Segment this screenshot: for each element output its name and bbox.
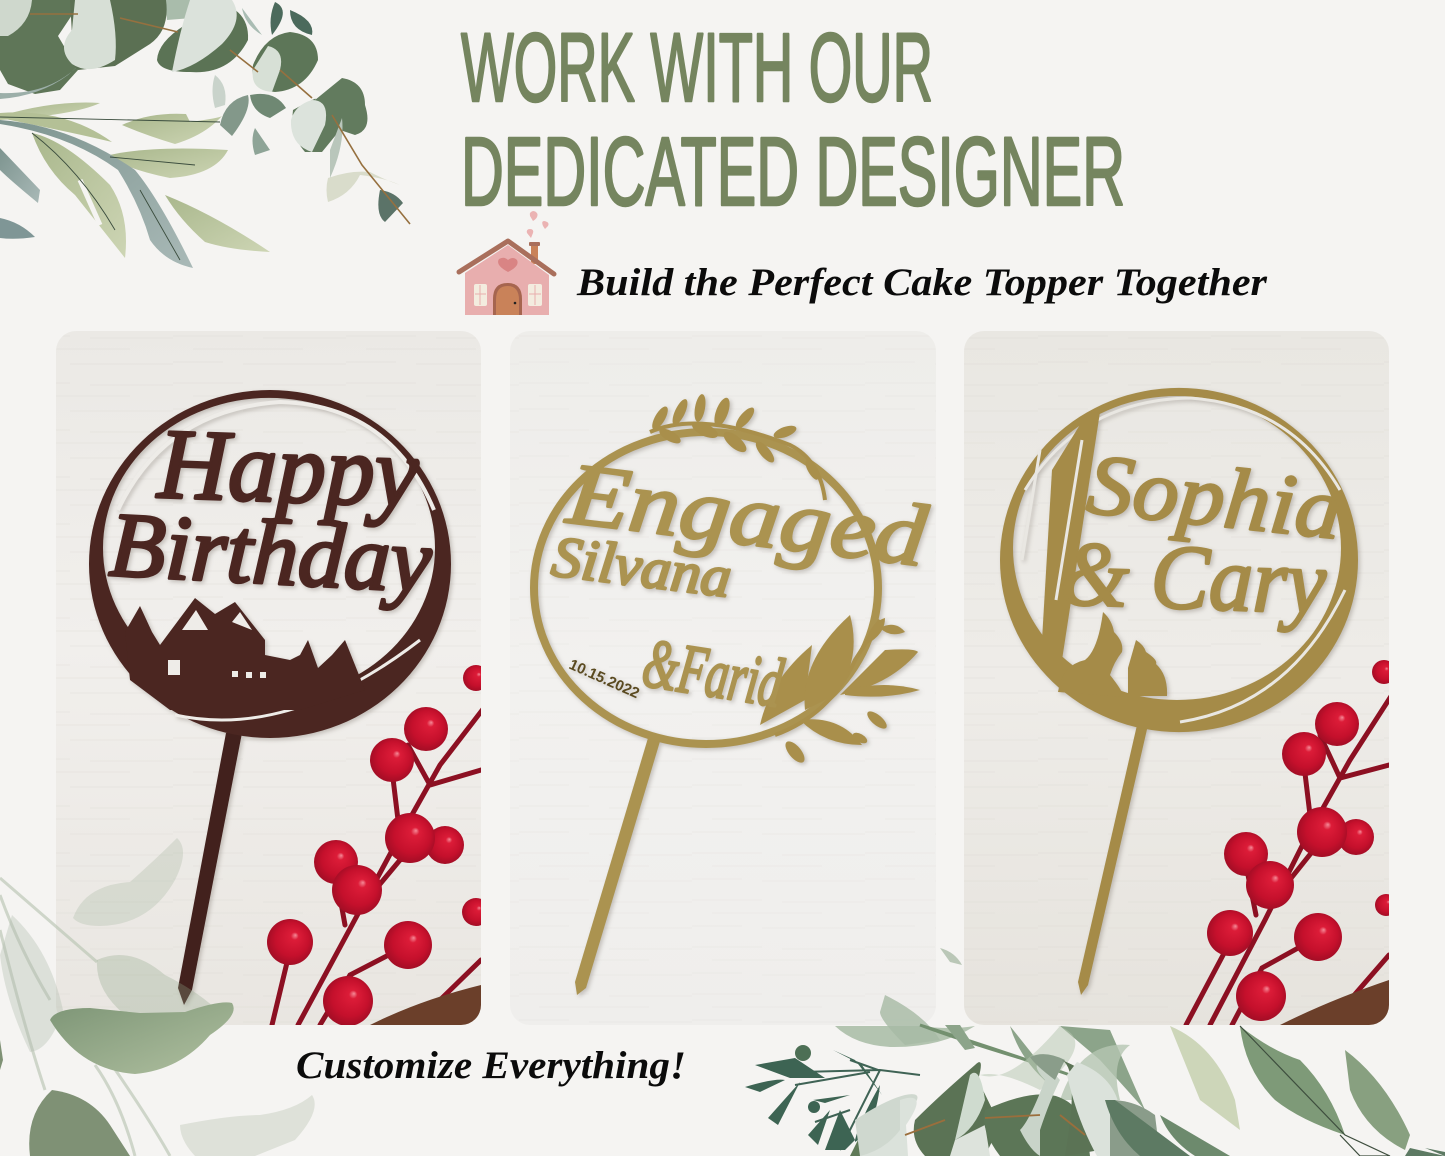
scene: cabin and pine trees [125,598,365,710]
illustration: top-left eucalyptus and olive foliage [0,0,410,268]
long green leaves [1240,1026,1345,1135]
sprig [795,1060,920,1150]
illustration: bottom-right eucalyptus foliage [745,948,1445,1156]
script text: Engaged [560,445,933,586]
topper: Happy Birthday [89,390,451,1005]
topper: Engaged wreath [534,393,933,995]
script text [1059,435,1347,633]
berries [1186,660,1397,1025]
caption: Customize Everything! [296,1044,686,1087]
berries [267,665,490,1026]
wood background [56,331,481,1025]
stems [0,878,170,1156]
birch trees [1042,412,1100,660]
subtitle: Build the Perfect Cake Topper Together [576,261,1268,304]
script text [548,445,933,723]
date: 10.15.2022 [566,656,642,702]
script text: & Cary [1059,522,1328,633]
solid leaf [50,1002,234,1074]
rabbits [1058,612,1167,697]
panel: Sophia and Cary topper photo [964,331,1397,1025]
lower leaf [29,1090,130,1156]
script text: Sophia [1083,435,1347,558]
script text [107,408,434,612]
leaf sprig top [649,393,825,500]
script text: Birthday [107,493,434,612]
edge leaf [0,1040,3,1070]
leaf wreath lower right [760,615,920,766]
icon: pink house with hearts [459,211,554,315]
wood background [964,331,1389,1025]
panel: Engaged topper photo [510,331,936,1025]
script text: Happy [154,408,421,528]
wood background [510,331,936,1025]
eucalyptus leaves [850,1139,895,1156]
script text: &Farid [637,625,788,723]
pale leaves [880,995,940,1045]
title [461,13,1125,226]
script text: Silvana [548,523,735,610]
panel: Happy Birthday topper photo [56,331,490,1026]
faded leaves [73,838,183,926]
title line 1: WORK WITH OUR [461,13,933,122]
illustration: bottom-left faded leaves [0,838,315,1156]
topper: Sophia and Cary [1000,388,1358,995]
